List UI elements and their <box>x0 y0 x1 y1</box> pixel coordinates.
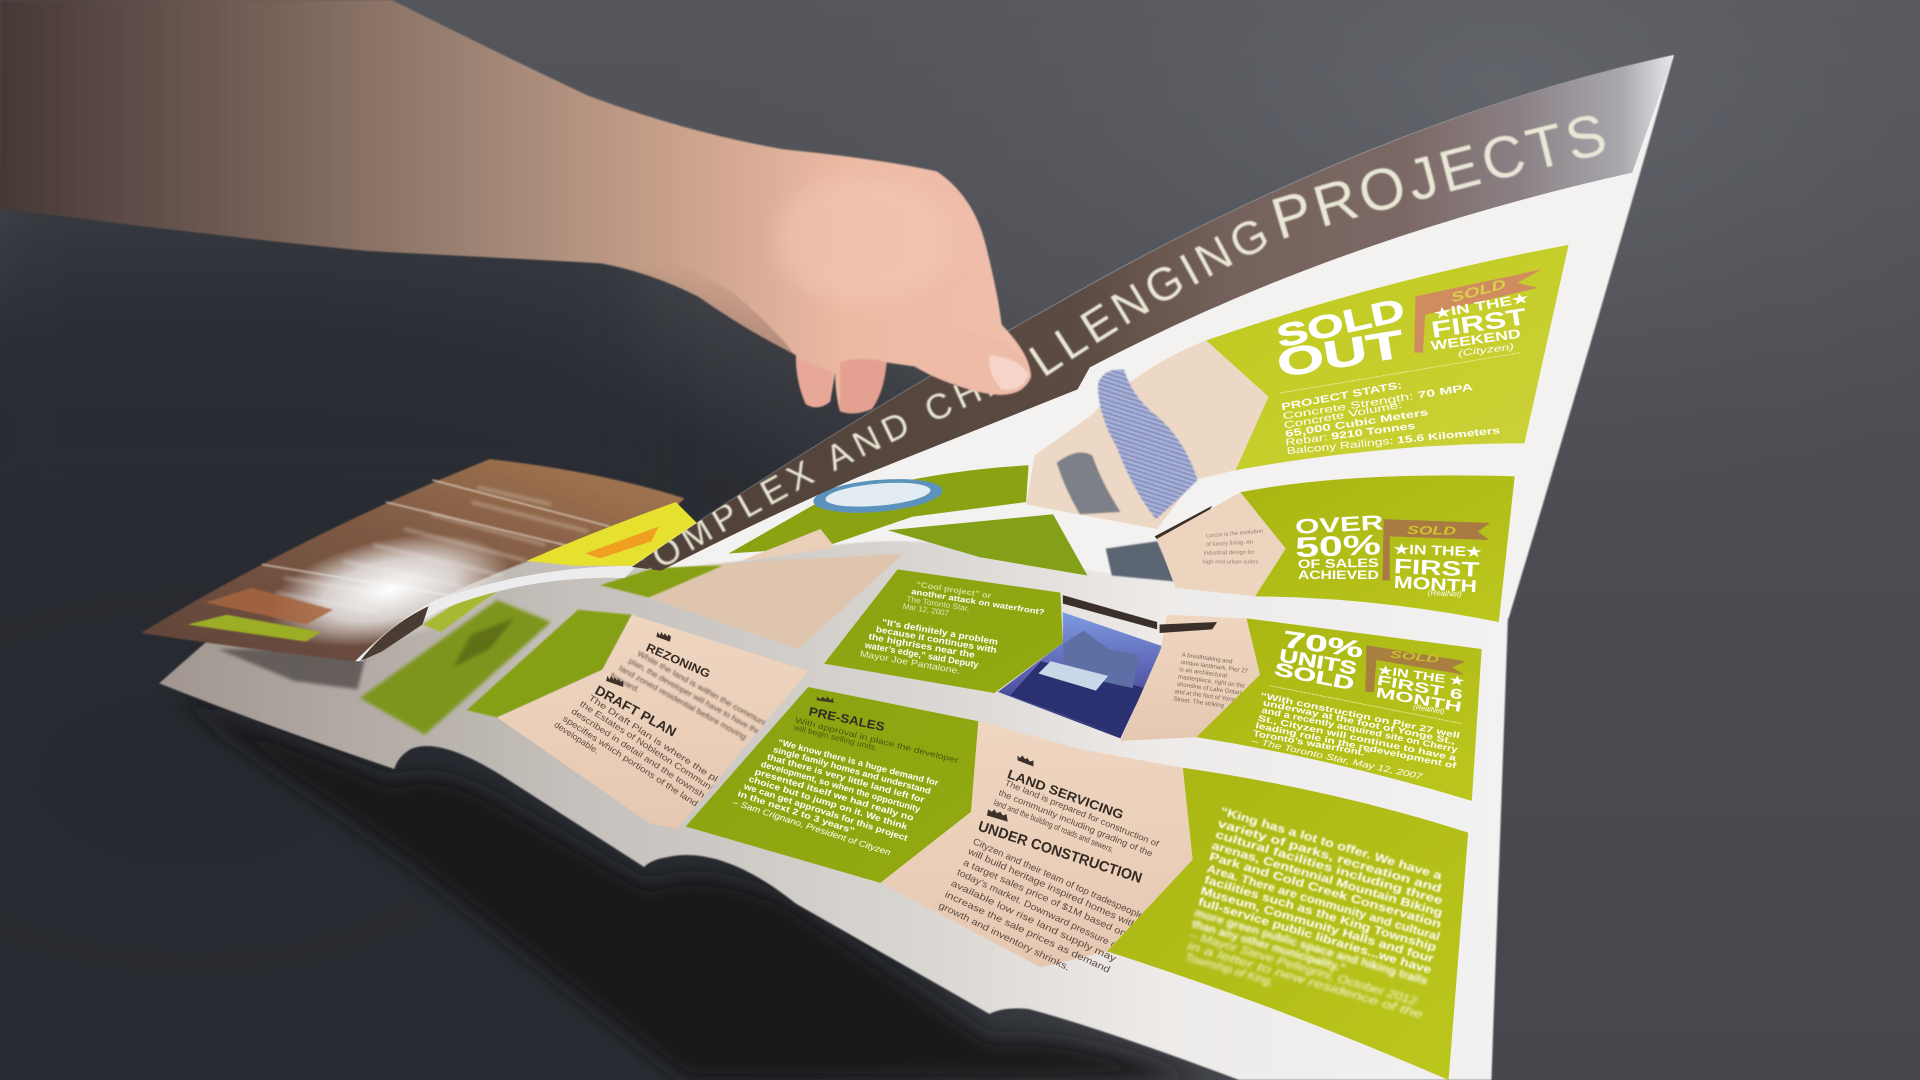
icon: under construction crown <box>987 809 1008 822</box>
flag label: SOLD <box>1407 524 1457 538</box>
divider <box>1270 686 1462 724</box>
flag text: FIRST <box>1430 303 1528 343</box>
text: peach block: of luxury living. An <box>1206 540 1253 548</box>
green stripes beneath curl <box>422 585 502 632</box>
hand and forearm <box>0 0 1031 413</box>
flag text: MONTH <box>1393 572 1477 596</box>
flag label: SOLD <box>1449 276 1508 305</box>
brown underside with reversed text <box>360 606 429 661</box>
text: king quote blurred end and attribution <box>1183 907 1429 1021</box>
text: rezoning body: plan, the developer will have to have the <box>627 656 762 737</box>
text: under construction body: increase the sale prices as demand <box>943 889 1112 975</box>
upper page: curled sheet <box>632 54 1674 622</box>
peach block under band <box>1026 340 1269 529</box>
text: toronto star quote: – The Toronto Star, May 12, 2007 <box>1250 735 1425 782</box>
panel: peach text block beside 70% units <box>1120 615 1260 741</box>
peach block beside over 50% <box>1157 492 1286 596</box>
stat: 70% units sold: SOLD <box>1273 658 1356 694</box>
text: land servicing body <box>992 777 1161 859</box>
text: project stats: Concrete Volume: <box>1283 400 1403 432</box>
text: pier 27 description: A breathtaking and <box>1181 651 1233 665</box>
ribbon near tower <box>1155 506 1212 542</box>
stat: sold out <box>1273 291 1408 386</box>
text: pre-sales quote: – Sam Crignano, President of Cityzen <box>731 797 892 858</box>
text: pre-sales quote: development, so when the opportunity <box>760 759 922 814</box>
flag text: (RealNet) <box>1413 702 1445 716</box>
text: toronto star quote: leading role in the redevelopment of <box>1255 720 1457 771</box>
title text <box>641 115 1606 570</box>
heading: land servicing: LAND SERVICING <box>1006 766 1126 822</box>
stat: 70% units sold <box>1273 626 1366 694</box>
title text: COMPLEX AND CHA <box>641 384 994 570</box>
text: cool project quote: “Cool project” or <box>916 580 992 600</box>
text: peach block: high end urban suites <box>1202 559 1259 565</box>
blurred text lines <box>276 487 588 612</box>
text: cool project quote: because it continues with <box>875 624 997 655</box>
text: king quote blurred end and attribution: – Mayor Steve Pellegrini, October 2012 <box>1187 929 1419 1008</box>
panel: far left page with blurred photo and green block <box>218 600 551 735</box>
palm highlight <box>775 175 951 302</box>
text: pre-sales quote: presented itself we had really no <box>754 766 915 823</box>
text: king township quote <box>1197 806 1444 977</box>
flag text: (Cityzen) <box>1457 342 1515 358</box>
heading: draft plan: DRAFT PLAN <box>592 683 679 740</box>
text: under construction body: available low rise land supply may <box>949 878 1118 964</box>
ribbon: success <box>1063 595 1157 629</box>
icon: draft plan crown <box>606 676 623 687</box>
little finger <box>796 358 833 407</box>
icon: pre-sales crown <box>817 697 834 703</box>
callout: sold out <box>1273 269 1542 457</box>
stat: over 50% of sales achieved: 50% <box>1295 529 1381 563</box>
finger shading <box>840 359 887 413</box>
white section rules <box>262 480 610 595</box>
text: draft plan body: the Estates of Nobleton Community <box>578 699 723 797</box>
text: pre-sales body <box>792 716 960 765</box>
text: peach block: Lorcor is the evolution <box>1206 529 1263 540</box>
text: king quote blurred end and attribution: Township of King. <box>1183 951 1275 989</box>
text: pre-sales quote: in the next 2 to 3 years” <box>737 788 856 836</box>
panel: sold out green <box>1206 245 1569 470</box>
ribbon <box>1160 622 1217 633</box>
text: cool project quote: Mar 12, 2007 <box>902 602 950 618</box>
icon: rezoning crown <box>656 632 671 642</box>
callout: over 50% <box>1295 511 1490 599</box>
thumbnail <box>989 355 1029 390</box>
medallion <box>812 474 944 517</box>
heading: under construction: UNDER CONSTRUCTION <box>976 819 1144 887</box>
text: cool project quote: the highrises near the <box>868 631 976 660</box>
text: under construction body <box>937 836 1146 975</box>
small peach corner <box>741 529 835 561</box>
text: peach block <box>1202 529 1263 565</box>
text: king quote blurred end and attribution: more green public space and hiking trails <box>1193 907 1429 988</box>
text: king township quote: arenas, Centennial Mountain Biking <box>1210 840 1444 920</box>
text: toronto star quote: Toronto’s waterfront.” <box>1252 728 1371 759</box>
text: pre-sales quote: choice but to jump on it. We think <box>748 774 909 832</box>
text: king township quote: facilities such as the King Township <box>1203 874 1438 954</box>
text: king township quote: “King has a lot to offer. We have a <box>1219 806 1444 883</box>
shadows beneath the brochure <box>171 696 1200 1080</box>
text: pier 27 description: Street. The striking <box>1173 695 1224 710</box>
icon: flag <box>1365 645 1466 692</box>
text: king township quote: cultural facilities including three <box>1214 829 1444 908</box>
green panel under fold <box>888 514 1087 576</box>
upper green sliver <box>600 566 722 598</box>
flag text: MONTH <box>1375 684 1463 715</box>
flag text: FIRST 6 <box>1376 672 1464 703</box>
icon: flag <box>1414 269 1542 353</box>
table on flap <box>206 588 333 624</box>
flag label: SOLD <box>1389 650 1440 666</box>
thumb and finger detail <box>888 321 1031 395</box>
text: draft plan body: The Draft Plan is where the plan <box>587 692 731 791</box>
yellow-orange graphic strip <box>527 502 698 566</box>
back flap: brown timeline page <box>141 459 698 666</box>
text: cool project quote: Mayor Joe Pantalone. <box>859 648 961 676</box>
orange accent <box>585 527 659 558</box>
green table row <box>187 615 321 642</box>
stat: 70% units sold: 70% <box>1281 626 1366 663</box>
text: project stats: Balcony Railings: 15.6 Kilometers <box>1286 425 1501 457</box>
text: draft plan body: described in detail and the township <box>570 706 714 805</box>
flag text: ★IN THE★ <box>1393 541 1482 560</box>
title band <box>632 55 1674 571</box>
flag text: ★IN THE★ <box>1433 290 1530 321</box>
text: land servicing body: land and the building of roads and sewers. <box>992 797 1115 855</box>
text: pre-sales quote: that there is very little land left for <box>766 751 926 805</box>
text: cool project quote: “It’s definitely a problem <box>881 617 999 647</box>
lower spread: white sheet <box>159 508 1509 1080</box>
flag text: ★IN THE ★ <box>1377 664 1466 689</box>
icon: land servicing crown <box>1018 756 1033 767</box>
text: draft plan body: specifies which portions of the land <box>561 713 700 809</box>
heading: pre-sales: PRE-SALES <box>808 704 886 734</box>
text: project stats <box>1281 380 1501 457</box>
panel: king quote <box>1107 768 1468 1080</box>
text: draft plan body <box>554 694 718 806</box>
text: pier 27 description: unique landmark, Pier 27 <box>1180 659 1249 675</box>
panel: 70% units sold <box>1196 618 1482 801</box>
text: pre-sales quote: we can get approvals for this project <box>742 781 909 843</box>
text: rezoning body: land zoned residential before moving <box>617 664 748 742</box>
text: project stats: 65,000 Cubic Meters <box>1284 407 1430 440</box>
text: king township quote: Museum, Community Halls and four <box>1199 885 1436 966</box>
text: pier 27 description <box>1173 651 1249 710</box>
title text: LLENGING <box>1028 220 1268 377</box>
underside curl <box>355 566 637 661</box>
stat: sold out: OUT <box>1274 323 1407 386</box>
icon: flag <box>1382 519 1490 580</box>
text: cool project quote <box>859 580 1045 676</box>
panel: cool project green block <box>824 569 1063 693</box>
text: project stats: Concrete Strength: 70 MPA <box>1282 382 1474 422</box>
text: king quote blurred end and attribution: in a letter to new residence of the <box>1186 940 1424 1021</box>
photo: waterfront rendering <box>998 612 1163 738</box>
text: under construction body: today’s market. Downward pressure on <box>955 867 1124 953</box>
text: under construction body: growth and inventory shrinks. <box>937 900 1071 972</box>
text: pre-sales body: will begin selling units. <box>792 723 878 752</box>
text: pre-sales quote <box>731 737 940 858</box>
text: pre-sales quote: single family homes and understand <box>772 744 932 796</box>
text: rezoning body: While the land is within the community <box>636 649 774 731</box>
text: pier 27 description: shoreline of Lake Ontario <box>1176 681 1246 697</box>
text: king township quote: variety of parks, recreation and <box>1216 818 1443 895</box>
stat: over 50% of sales achieved: OF SALES <box>1298 556 1379 571</box>
text: king quote blurred end and attribution: than any other municipality.” <box>1191 918 1347 975</box>
text: land servicing body: the community including grading of the <box>997 787 1154 859</box>
text: toronto star quote: underway at the foot of Yonge St., <box>1262 697 1456 746</box>
text: rezoning body <box>609 649 774 742</box>
flag text: WEEKEND <box>1430 326 1522 353</box>
text: pier 27 description: masterpiece, right on the <box>1178 673 1246 690</box>
stat: over 50% of sales achieved <box>1295 511 1384 582</box>
text: rezoning body: forward. <box>609 671 641 694</box>
text: pier 27 description: is an architectural <box>1179 666 1227 680</box>
stat: over 50% of sales achieved: OVER <box>1295 511 1384 539</box>
text: toronto star quote: “With construction on Pier 27 well <box>1260 690 1461 740</box>
flag text <box>1393 541 1482 599</box>
text: draft plan body: developable. <box>552 719 601 756</box>
panel: pre-sales <box>686 687 978 883</box>
title text: PROJECTS <box>1272 115 1606 240</box>
text: cool project quote: another attack on waterfront? <box>911 587 1045 617</box>
stat: sold out: SOLD <box>1273 291 1408 355</box>
text: project stats: Rebar: 9210 Tonnes <box>1285 421 1417 449</box>
text: under construction body: Cityzen and their team of top tradespeople <box>971 836 1146 921</box>
flag text <box>1375 664 1466 716</box>
text: under construction body: will build heritage inspired homes with <box>965 846 1138 930</box>
text: king township quote: Area. There are community and cultural <box>1205 863 1441 944</box>
flag text: FIRST <box>1393 555 1480 582</box>
text: pier 27 description: and at the foot of Yonge <box>1174 688 1239 704</box>
panel: over 50% green <box>1240 475 1515 622</box>
upper row peach and green behind band <box>649 553 904 649</box>
text: pre-sales quote: “We know there is a huge demand for <box>777 737 940 788</box>
peach background <box>497 615 808 829</box>
panel: rezoning and draft plan <box>467 553 904 829</box>
flag text: (RealNet) <box>1428 588 1462 599</box>
stat: over 50% of sales achieved: ACHIEVED <box>1298 568 1379 582</box>
text: under construction body: a target sales price of $1M based on <box>962 857 1128 939</box>
green block under medallion <box>729 465 1029 553</box>
text: king township quote: Park and Cold Creek Conservation <box>1208 851 1442 931</box>
panel: land servicing and under construction <box>880 721 1193 975</box>
divider <box>1280 353 1521 393</box>
text: toronto star quote <box>1250 690 1461 782</box>
icon: twisted tower render <box>1057 369 1198 582</box>
text: pre-sales body: With approval in place the developer <box>794 716 960 765</box>
text: project stats: PROJECT STATS: <box>1281 380 1403 413</box>
heading: rezoning: REZONING <box>644 641 712 681</box>
text: toronto star quote: St., Cityzen will continue to have a <box>1257 713 1457 763</box>
text: king township quote: full-service public libraries...we have <box>1197 896 1433 977</box>
text: cool project quote: The Toronto Star, <box>906 594 970 613</box>
flag text <box>1430 290 1530 358</box>
text: toronto star quote: and a recently acquired site on Cherry <box>1261 705 1459 754</box>
green block left of rezoning <box>467 610 632 718</box>
stat: 70% units sold: UNITS <box>1278 644 1358 679</box>
highlight glare <box>259 514 520 666</box>
text: land servicing body: The land is prepared for construction of <box>1003 777 1161 849</box>
text: peach block: industrial design for <box>1204 550 1255 557</box>
text: cool project quote: water’s edge,” said Deputy <box>863 640 979 670</box>
